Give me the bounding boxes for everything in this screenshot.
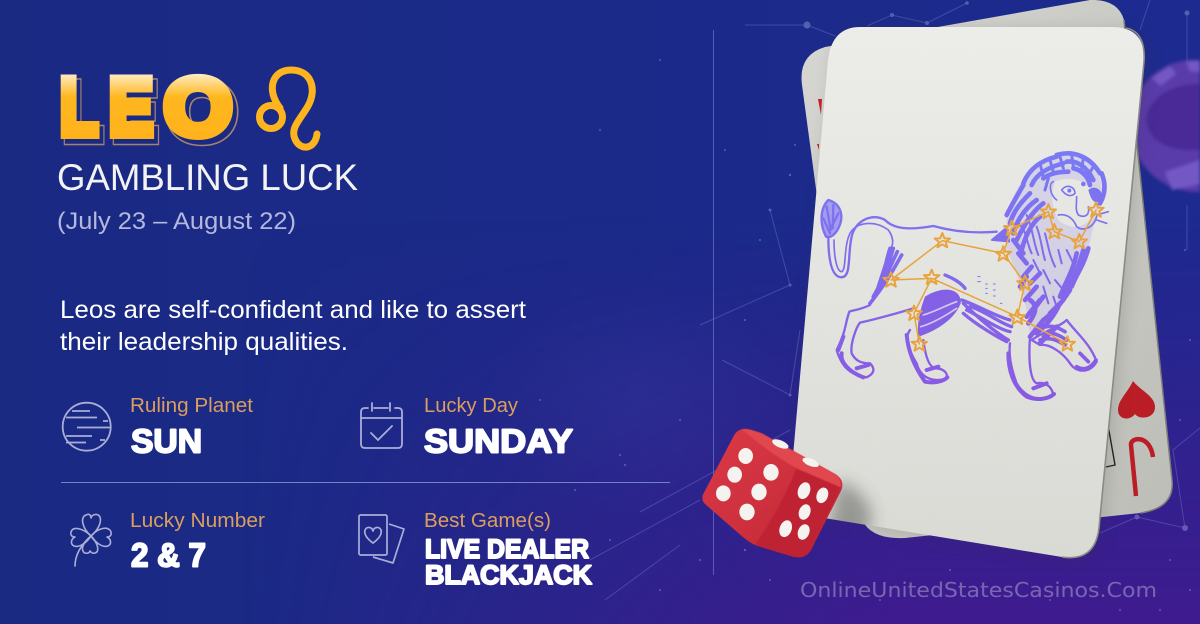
title: LEO: E bbox=[113, 68, 157, 158]
item: best games bbox=[359, 510, 592, 590]
subtitle: GAMBLING LUCK bbox=[57, 157, 358, 198]
description text: their leadership qualities. bbox=[60, 328, 348, 356]
description text: Leos are self-confident and like to assert bbox=[60, 296, 526, 324]
item: lucky number: Lucky Number bbox=[130, 510, 265, 532]
face bbox=[1062, 186, 1075, 196]
mane tint bbox=[1007, 153, 1102, 337]
icon: planet bbox=[63, 403, 111, 451]
icon: leo zodiac symbol bbox=[260, 70, 317, 147]
watermark: OnlineUnitedStatesCasinos.Com bbox=[800, 578, 1157, 602]
body mane strokes bbox=[1007, 185, 1088, 343]
title: LEO: O bbox=[168, 68, 236, 158]
lion illustration bbox=[821, 153, 1108, 399]
pips left face bbox=[738, 448, 753, 464]
item: lucky day: SUNDAY bbox=[424, 422, 573, 460]
dots bbox=[978, 277, 1002, 303]
card suit marks: top left bbox=[817, 99, 822, 150]
constellation bbox=[883, 202, 1104, 351]
title: LEO: O bbox=[168, 68, 236, 158]
playing card: back bbox=[801, 0, 1172, 538]
icon: calendar bbox=[361, 403, 402, 448]
card artwork fragment bbox=[1106, 425, 1115, 467]
item: best games: BLACKJACK bbox=[425, 560, 592, 590]
title: LEO bbox=[60, 62, 236, 158]
item: ruling planet: Ruling Planet bbox=[130, 395, 253, 417]
item: ruling planet bbox=[63, 395, 253, 460]
dice bbox=[702, 429, 842, 557]
item: lucky number bbox=[71, 510, 265, 574]
item: best games: LIVE DEALER bbox=[425, 534, 589, 564]
background constellation lines and stars bbox=[539, 0, 1200, 611]
tail bbox=[821, 200, 841, 237]
hind leg right bbox=[907, 330, 947, 380]
divider bbox=[61, 482, 670, 483]
vertical divider bbox=[713, 30, 714, 575]
item: ruling planet: SUN bbox=[131, 422, 202, 460]
poker chip bbox=[1130, 60, 1200, 192]
head mane scallops bbox=[1023, 153, 1104, 203]
dice shadow bbox=[825, 480, 872, 545]
date range: (July 23 – August 22) bbox=[57, 208, 296, 235]
front leg bbox=[1010, 337, 1053, 399]
title: LEO: E bbox=[113, 68, 157, 158]
pips top face bbox=[771, 437, 790, 451]
haunch shading bbox=[918, 290, 961, 337]
card letter: J bbox=[1131, 439, 1153, 496]
icon: clover bbox=[71, 514, 111, 566]
back shading bbox=[870, 248, 902, 303]
raised paw bbox=[1032, 320, 1097, 371]
title: LEO: E bbox=[109, 62, 153, 152]
pips right face bbox=[795, 480, 813, 501]
title: LEO: L bbox=[64, 68, 102, 158]
title: LEO: L bbox=[64, 68, 102, 158]
card suit: heart bbox=[1118, 381, 1155, 419]
item: lucky day bbox=[361, 395, 573, 460]
item: lucky day: Lucky Day bbox=[424, 395, 518, 417]
title: LEO: O bbox=[164, 62, 232, 152]
background bbox=[402, 0, 1200, 624]
title: LEO: L bbox=[60, 62, 98, 152]
playing card: front bbox=[790, 27, 1148, 560]
belly shading bbox=[945, 275, 1012, 342]
item: lucky number: 2 & 7 bbox=[131, 536, 206, 574]
item: best games: Best Game(s) bbox=[424, 510, 551, 532]
hind leg left bbox=[837, 305, 913, 377]
icon: cards bbox=[359, 515, 404, 563]
